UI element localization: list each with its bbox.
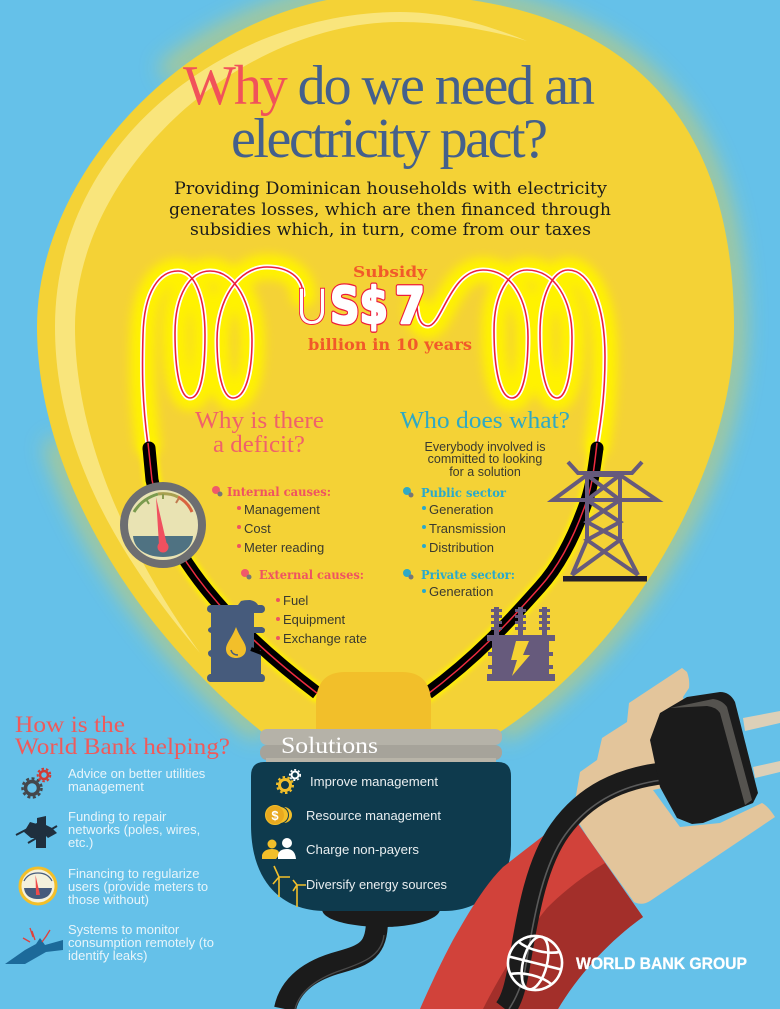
- list: public sector: Public sector: [421, 486, 507, 500]
- help item: funding: etc.): [68, 835, 93, 850]
- heading: why is there a deficit: [195, 408, 324, 458]
- item: charge non-payers: [262, 838, 419, 859]
- intro text: generates losses, which are then financed through: [169, 200, 611, 220]
- commitment text: Everybody involved is: [425, 440, 545, 454]
- list: external causes: Equipment: [283, 612, 346, 627]
- list: public sector: Generation: [429, 502, 493, 517]
- icon: oil barrel: [207, 600, 265, 682]
- icon: transmission tower: [553, 462, 657, 582]
- heading: how is the world bank helping: [15, 712, 230, 759]
- subsidy figure: U: [296, 278, 328, 336]
- list: private sector: Generation: [429, 584, 493, 599]
- list: internal causes: Cost: [244, 521, 271, 536]
- help item: financing: [20, 866, 208, 907]
- heading: how is the world bank helping: How is the: [15, 712, 125, 737]
- solutions heading: Solutions: [281, 733, 378, 758]
- heading: why is there a deficit: a deficit?: [213, 432, 305, 458]
- subsidy figure: 7: [395, 277, 425, 335]
- item: diversify energy sources: Diversify energy sources: [306, 877, 447, 892]
- plug highlight: [670, 699, 752, 805]
- list: external causes: External causes:: [259, 568, 364, 582]
- help item: advice: Advice on better utilities: [68, 766, 206, 781]
- help item: financing: those without): [68, 892, 149, 907]
- commitment text: committed to looking: [428, 452, 542, 466]
- help item: funding: Funding to repair: [68, 809, 167, 824]
- title: Why do we need an: [183, 55, 595, 117]
- list: external causes: Fuel: [283, 593, 308, 608]
- commitment text: for a solution: [449, 465, 521, 479]
- light bulb glass: [37, 0, 734, 732]
- subsidy figure: [296, 263, 472, 354]
- help item: financing: Financing to regularize: [68, 866, 200, 881]
- list: public sector: Distribution: [429, 540, 494, 555]
- logo: world bank group: WORLD BANK GROUP: [576, 954, 747, 973]
- logo: world bank group: [502, 930, 747, 996]
- heading: who does what: Who does what?: [400, 408, 570, 434]
- panel: solutions: [251, 762, 511, 911]
- item: improve management: [277, 770, 438, 793]
- item: diversify energy sources: [273, 866, 447, 907]
- help item: systems: [5, 922, 214, 964]
- intro text: [169, 179, 611, 240]
- plug cord: [505, 773, 665, 1009]
- list: private sector: [403, 568, 515, 599]
- plug body: [650, 692, 758, 824]
- item: resource management: $: [271, 808, 279, 823]
- title: electricity pact?: [231, 108, 548, 170]
- list: internal causes: [212, 485, 331, 555]
- subsidy figure: S$: [330, 277, 388, 335]
- icon: transformer: [487, 607, 555, 681]
- help item: advice: management: [68, 779, 144, 794]
- heading: why is there a deficit: Why is there: [195, 408, 324, 434]
- title: [183, 55, 595, 170]
- item: resource management: [266, 806, 441, 824]
- help item: systems: identify leaks): [68, 948, 147, 963]
- bulb halo: [55, 0, 734, 732]
- list: external causes: [241, 568, 367, 646]
- intro text: Providing Dominican households with electricity: [174, 179, 607, 199]
- subsidy figure: 7: [395, 277, 425, 335]
- list: public sector: [403, 486, 507, 555]
- list: external causes: Exchange rate: [283, 631, 367, 646]
- bulb base dome: [316, 672, 431, 730]
- sleeve: [420, 815, 643, 1009]
- item: charge non-payers: Charge non-payers: [306, 842, 419, 857]
- help item: systems: consumption remotely (to: [68, 935, 214, 950]
- help item: funding: networks (poles, wires,: [68, 822, 200, 837]
- plug prongs: [743, 711, 780, 778]
- black cables: [142, 442, 604, 697]
- illustration: hand holding plug: [420, 668, 780, 1009]
- fingers and palm: [573, 668, 775, 904]
- icon: gauge: [124, 486, 202, 564]
- subsidy figure: Subsidy: [353, 263, 428, 281]
- power cord from bulb: [285, 909, 440, 1009]
- intro text: subsidies which, in turn, come from our taxes: [190, 220, 591, 240]
- list: internal causes: Management: [244, 502, 320, 517]
- help item: advice: [22, 766, 206, 798]
- help item: systems: Systems to monitor: [68, 922, 180, 937]
- help item: financing: users (provide meters to: [68, 879, 208, 894]
- heading: how is the world bank helping: World Bank helping?: [15, 734, 230, 759]
- item: improve management: Improve management: [310, 774, 438, 789]
- list: internal causes: Meter reading: [244, 540, 324, 555]
- help item: funding: [16, 809, 200, 850]
- subsidy figure: S$: [330, 277, 388, 335]
- commitment text: [425, 440, 545, 479]
- list: internal causes: Internal causes:: [227, 485, 331, 499]
- list: private sector: Private sector:: [421, 568, 515, 582]
- item: resource management: Resource management: [306, 808, 441, 823]
- glowing filament wire: [143, 267, 605, 693]
- list: public sector: Transmission: [429, 521, 506, 536]
- bulb screw threads: [260, 729, 502, 764]
- subsidy figure: billion in 10 years: [308, 335, 472, 354]
- sleeve shadow: [483, 863, 643, 1009]
